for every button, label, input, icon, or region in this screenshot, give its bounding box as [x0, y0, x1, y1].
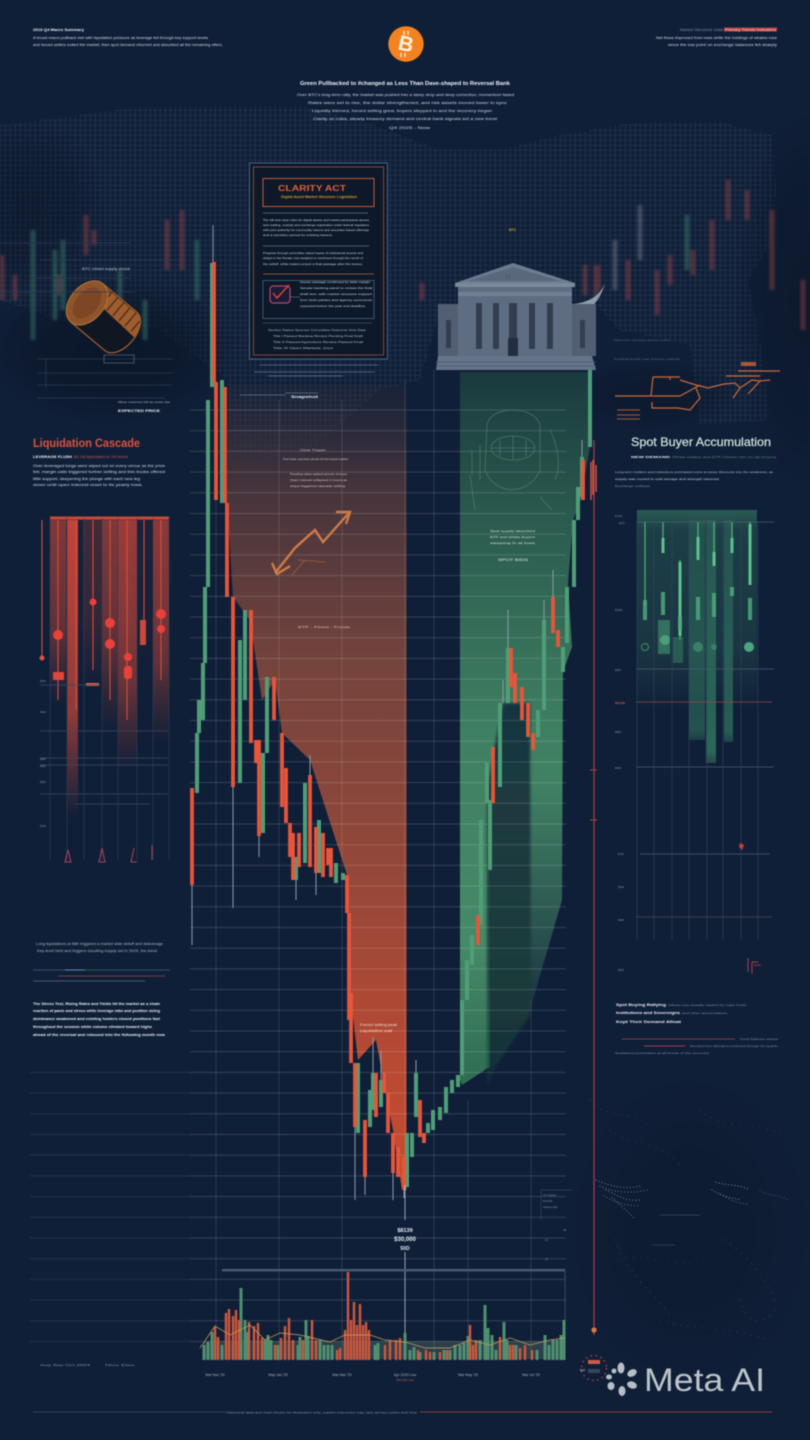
- chart axis labels: Apr 2025 Low: [394, 1373, 416, 1377]
- header: top-left note: A broad macro pullback met with liquidation pressure as leverage fell through key support levels: [33, 36, 209, 40]
- red area annotations: Forced selling peak: [360, 1023, 398, 1027]
- document text: the selloff, while traders priced a final passage after the recess.: [263, 262, 363, 266]
- heading: Clarity Act: CLARITY ACT: [278, 184, 346, 193]
- right lower text block: Fund balance sheets: [740, 1037, 779, 1041]
- chart: liquidation heat columns: $94K: [40, 679, 46, 683]
- panel: recovery green area: [460, 372, 592, 1085]
- chart: spot buyer columns: $114K: [615, 514, 623, 518]
- title and intro: Q4 2025 - Now: [389, 126, 431, 130]
- chart: liquidation heat columns: [40, 516, 169, 862]
- title and intro: Over BTC's long-term rally, the market was pushed into a steep drop and deep correction, momentum faded: [297, 93, 514, 97]
- coin annotations: BTC mined supply shock: [82, 267, 130, 271]
- spot buyer text block: Long-term holders and institutions purchased coins at steep discounts into the weakness, as: [615, 470, 774, 474]
- header: top-left note: [33, 28, 223, 47]
- document footer table: Title III Open Markets Joint: [273, 346, 333, 350]
- icon: tilted bitcoin barrel coin: [58, 273, 148, 360]
- chart axis labels: $30,000 Low: [396, 1378, 414, 1382]
- faded background candles: [2, 180, 803, 340]
- red area annotations: Open interest collapsed in hours as: [290, 478, 348, 482]
- heading: Clarity Act: Digital Asset Market Structure Legislation: [281, 195, 357, 199]
- vertical red timeline: [590, 440, 597, 1335]
- title and intro: [297, 81, 514, 130]
- chart: spot buyer columns: $85K: [615, 730, 621, 734]
- chart: spot buyer columns: $55K: [618, 968, 624, 972]
- spot buyer text block: Whale wallets and ETF inflows rise on dip buying: [672, 455, 777, 459]
- icon: checkbox: from both parties and agency comments: [300, 298, 373, 302]
- coin annotations: Miner reserves fell as costs rise: [118, 400, 171, 404]
- panel: capitulation red area: [227, 385, 406, 1190]
- icon: green outline figure: [470, 410, 558, 510]
- document footer table: Title II Passed Agriculture Review Passed Final: [273, 340, 363, 344]
- document text: [263, 213, 374, 274]
- chart: spot buyer columns: $70K: [618, 852, 624, 856]
- spot buyer text block: Exchange outflows: [615, 484, 651, 488]
- coin annotations: EXPECTED PRICE: [118, 409, 161, 413]
- red area annotations: Fed chair nominee shock hit the bond market: [283, 457, 348, 461]
- chart axis labels: Mar Mar '25: [332, 1373, 352, 1377]
- lines below document: [240, 365, 378, 399]
- document text: spot trading, custody and exchange registration under federal regulators: [263, 223, 370, 227]
- icon: checkbox: [263, 280, 374, 318]
- footer line: Historical data and chart shown for illustration only, market outcomes may vary across cycles and time: [227, 1410, 417, 1414]
- document text: with joint authority for commodity tokens and securities based offerings: [263, 228, 370, 232]
- chart: spot buyer columns: $100K: [615, 608, 623, 612]
- icon: checkbox: Senate banking panel to review the final: [300, 286, 372, 290]
- document text: The bill sets clear rules for digital assets and market participants across: [263, 218, 370, 222]
- green area annotations: Spot supply absorbed: [490, 529, 535, 533]
- green area annotations: SPOT BIDS: [498, 558, 528, 562]
- chart: spot buyer columns: $65K: [618, 885, 624, 889]
- chart axis labels: Mar Nov '24: [205, 1373, 225, 1377]
- header: top-right note: since the low point on exchange balances fell sharply: [668, 43, 778, 47]
- callout: bottom price label: $30,000: [394, 1237, 416, 1243]
- right lower text block: Spot Buying Rallying: [616, 1003, 666, 1007]
- left lower caption: Key level held and triggers resulting supply set in 2025, the trend: [37, 949, 157, 953]
- document footer table: Title I Passed Banking Review Pending Final Draft: [273, 334, 363, 338]
- chart: liquidation heat columns: $88K: [40, 757, 46, 761]
- red area annotations: [283, 448, 398, 1033]
- icon: red badge ornament: $16: [580, 1368, 585, 1372]
- chart: spot buyer columns: $90,000: [615, 701, 626, 705]
- left lower caption: [33, 942, 170, 981]
- liquidation text block: fell, margin calls triggered further selling and thin books offered: [33, 470, 165, 474]
- liquidation text block: LEVERAGE FLUSH: [33, 455, 73, 459]
- icon: checkbox: expected before the year end deadline.: [300, 304, 366, 308]
- icon: bitcoin: B: [396, 32, 416, 57]
- chart axis labels: May Jan '25: [268, 1373, 288, 1377]
- panel: Clarity Act document: [250, 163, 388, 359]
- left lower text block: reaction of panic and stress while leverage ratio and position sizing: [33, 1009, 160, 1013]
- spot buyer text block: [615, 455, 777, 488]
- icon: Federal Reserve building: [436, 263, 605, 370]
- chart: spot buyer columns: $130: [754, 963, 761, 967]
- title and intro: Clarity on rules, steady treasury demand and central bank signals set a new trend: [313, 117, 497, 121]
- left lower text block: The Stress Test, Rising Rates and Yields hit the market as a chain: [33, 1002, 160, 1006]
- red area annotations: ETF - Flows - Funds: [298, 625, 351, 629]
- small annotations right of chart: $74,000: [543, 1199, 553, 1203]
- title and intro: Green Pullbacked to #changed as Less Than Dave-shaped to Reversal Bank: [300, 81, 510, 87]
- red area annotations: Liquidation wall: [360, 1029, 392, 1033]
- header: top-right note: Market Structure Data: [680, 28, 723, 32]
- red area annotations: stops triggered cascade selling: [290, 484, 345, 488]
- spot buyer text block: supply was moved to cold storage and strength returned.: [615, 477, 720, 481]
- callout: bottom price label: 50D: [400, 1246, 410, 1252]
- chart: spot buyer columns: $80K: [615, 766, 621, 770]
- title and intro: Rates were set to rise, the dollar strengthened, and risk assets moved lower in sync: [308, 101, 507, 105]
- title and intro: Liquidity thinned, forced selling grew, buyers stepped in and the recovery began: [312, 109, 492, 113]
- coin annotations: [0, 243, 180, 413]
- chart: spot buyer columns: [615, 510, 774, 974]
- liquidation text block: $2.1B liquidated in 24 hours: [74, 455, 129, 459]
- chart grid: [30, 370, 566, 1360]
- chart: liquidation heat columns: $82K: [40, 780, 46, 784]
- red area annotations: Funding rates spiked across venues: [290, 472, 348, 476]
- small annotations right of chart: Q1 Support: [543, 1193, 557, 1197]
- document text: and a transition period for existing issuers.: [263, 233, 333, 237]
- right lower text block: and other accumulators: [682, 1011, 728, 1015]
- header: top-right note: [656, 28, 778, 47]
- heading: Spot Buyer Accumulation: Spot Buyer Accumulation: [631, 435, 771, 449]
- callout: bottom price label: $8139: [397, 1228, 413, 1234]
- top-right chart labels: Federal funds rate futures outlook: [614, 357, 681, 361]
- dark shadow wedge in green area: [487, 703, 531, 1085]
- header: top-left note: and forced sellers exited the market, then spot demand returned and absorbed all the remaining offers.: [33, 43, 223, 47]
- callout: bottom price label: [394, 1185, 416, 1360]
- small annotations right of chart: Volume high: [543, 1205, 558, 1209]
- document text: delays in the Senate vote weighed on sentiment through the month of: [263, 256, 363, 260]
- green area annotations: ETF and whale buyers: [490, 535, 536, 539]
- top-right chart labels: Discount window stress index: [614, 338, 671, 342]
- chart axis labels: Mar May '25: [458, 1373, 478, 1377]
- chart: spot buyer columns: $95K: [615, 668, 621, 672]
- spot buyer text block: NEW DEMAND: [631, 455, 672, 459]
- header: top-right note: Net flows improved from lows while the holdings of whales rose: [656, 36, 777, 40]
- small annotations right of chart: 10: [545, 1257, 548, 1261]
- heading: Liquidation Cascade: Liquidation Cascade: [33, 436, 140, 450]
- green area annotations: [490, 529, 536, 562]
- green area lower-right fade: [490, 780, 566, 1090]
- main candlestick chart: [192, 225, 590, 1200]
- small marker label: BTC: [509, 228, 517, 232]
- chart axis labels: Nov Dec: [105, 1363, 136, 1367]
- small annotations right of chart: [541, 1190, 700, 1261]
- lines below document: Snapshot: [291, 395, 320, 399]
- right lower text block: Demand from allocators continued through the quarter: [690, 1044, 778, 1048]
- right lower text block: Sustained purchases at all levels of the recovery.: [615, 1051, 710, 1055]
- document footer table: [263, 323, 372, 350]
- left lower text block: dominance weakened and existing holders closed positions fast: [33, 1017, 161, 1021]
- icon: checkbox: House passage confirmed by wide margin: [300, 280, 370, 284]
- document text: Progress through committee raised hopes of institutional access and: [263, 251, 363, 255]
- icon: red badge ornament: [580, 1356, 606, 1380]
- chart axis labels: [40, 1363, 540, 1382]
- right lower text block: Institutions and Sovereigns: [616, 1011, 680, 1015]
- icon: checkbox: draft text, with market structure support: [300, 292, 372, 296]
- chart: volume bars: [200, 1269, 565, 1360]
- top-right chart labels: [614, 338, 681, 361]
- right lower text block: Inflows rose steadily, backed by major funds: [668, 1003, 747, 1007]
- chart: liquidation heat columns: $85K: [40, 764, 46, 768]
- chart: spot buyer columns: $60K: [618, 918, 624, 922]
- liquidation text block: little support, deepening the plunge with each new leg: [33, 477, 140, 481]
- header: top-left note: 2019 Q4 Macro Summary: [33, 28, 84, 32]
- red area annotations: Clear Trigger: [300, 448, 326, 452]
- small annotations right of chart: 40: [563, 1228, 567, 1232]
- liquidation text block: Over-leveraged longs were wiped out on every venue as the price: [33, 464, 165, 468]
- watermark: Meta AI: [606, 1362, 765, 1398]
- chart axis labels: Mar Jul '25: [522, 1373, 540, 1377]
- chart: liquidation heat columns: $91K: [40, 710, 46, 714]
- liquidation text block: down until open interest reset to its yearly lows.: [33, 483, 143, 487]
- icon: bitcoin: [388, 26, 424, 62]
- document footer table: Section Status Sponsor Committee Outcome Vote Date: [268, 328, 366, 332]
- chart: liquidation heat columns: $76K: [40, 824, 46, 828]
- right lower text block: Kept Their Demand Afloat: [616, 1020, 682, 1024]
- network diagram: [615, 362, 780, 419]
- arrow: rising zigzag: [272, 512, 350, 575]
- watermark: Meta AI: Meta AI: [644, 1362, 765, 1398]
- left lower text block: [33, 1002, 165, 1037]
- chart axis labels: Aug Sep Oct 2024: [40, 1363, 91, 1367]
- green area annotations: stepping in at lows: [490, 541, 536, 545]
- left lower text block: throughout the session while volume climbed toward highs: [33, 1025, 152, 1029]
- left lower caption: Long liquidations at 88K triggered a market wide selloff and deleverage: [36, 942, 163, 946]
- world dot cluster: [590, 1100, 788, 1340]
- right lower text block: [615, 1003, 779, 1055]
- chart: spot buyer columns: $112: [619, 521, 625, 525]
- heading: Clarity Act: [263, 178, 374, 206]
- small annotations right of chart: 20: [545, 1238, 548, 1242]
- header: top-right note: Primary Trends Indicators: [725, 28, 777, 32]
- dotted world map: [0, 106, 776, 460]
- liquidation text block: [33, 455, 165, 487]
- left lower text block: ahead of the reversal and rebound into the following month now: [33, 1033, 165, 1037]
- icon: Federal Reserve building: M: [505, 274, 511, 281]
